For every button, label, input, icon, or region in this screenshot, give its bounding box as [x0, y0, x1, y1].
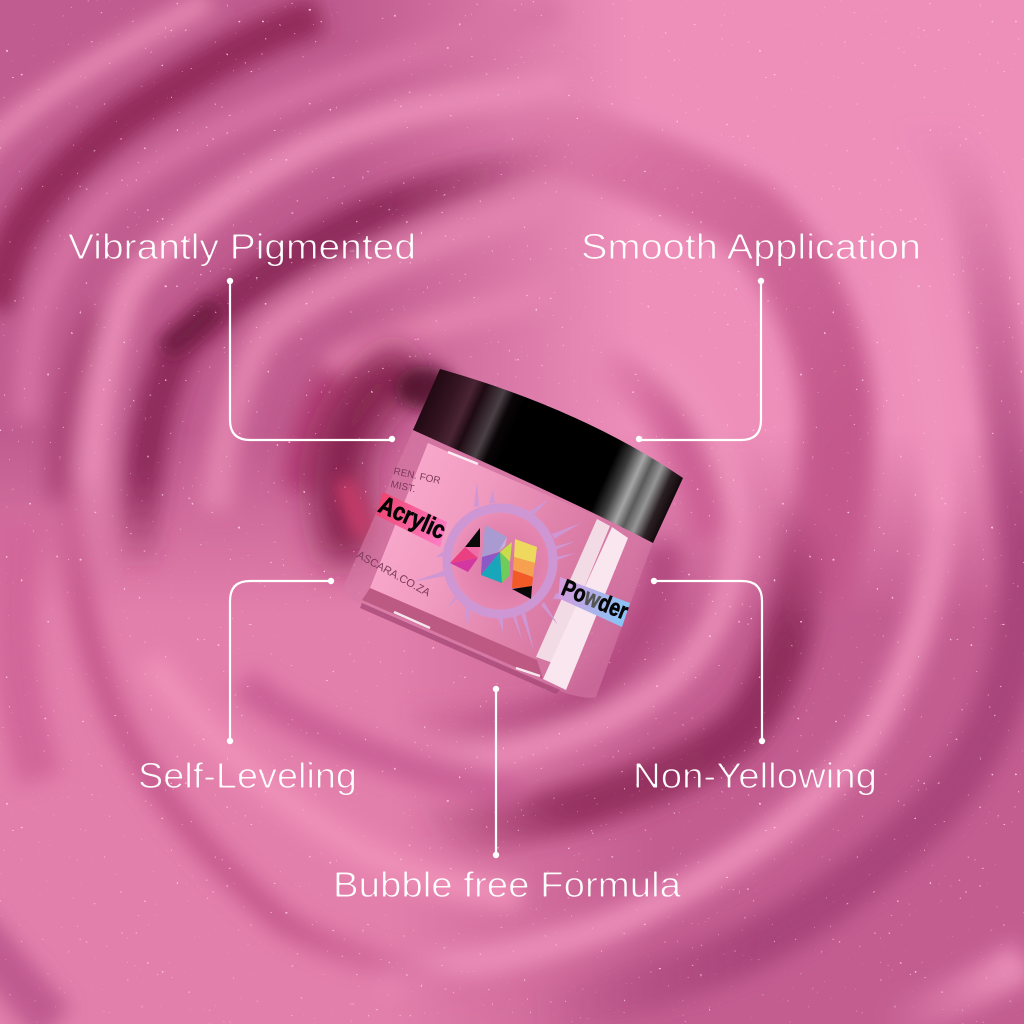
label: Powder: Powder — [558, 575, 632, 625]
heading: Vibrantly Pigmented: Vibrantly Pigmented — [68, 226, 416, 267]
connector: Vibrantly Pigmented — [227, 278, 395, 442]
bottom left folds — [73, 480, 120, 725]
bottom right folds — [420, 500, 803, 831]
product jar — [345, 366, 683, 698]
jar lid — [413, 369, 683, 543]
small print text: REN. FOR — [392, 466, 441, 487]
jar powder fill — [360, 443, 600, 694]
white stripe label — [536, 519, 628, 690]
jar glass body — [345, 430, 653, 698]
jar shadow — [395, 366, 455, 410]
connector: Non-Yellowing — [651, 578, 765, 744]
connector: Bubble free Formula — [493, 686, 499, 858]
small print text — [355, 466, 441, 600]
heading: Non-Yellowing: Non-Yellowing — [633, 755, 877, 796]
connector: Self-Leveling — [227, 578, 334, 744]
small print text: ASCARA.CO.ZA — [355, 549, 433, 600]
small print text: MIST. — [389, 479, 417, 495]
label: Acrylic: Acrylic — [375, 491, 450, 545]
heading: Bubble free Formula: Bubble free Formula — [333, 864, 682, 905]
logo mark — [450, 525, 537, 599]
heading: Smooth Application: Smooth Application — [581, 226, 921, 267]
top right folds — [520, 128, 838, 600]
logo splatter ring — [412, 482, 581, 651]
connector: Smooth Application — [636, 278, 764, 442]
top left folds — [0, 0, 210, 165]
heading: Self-Leveling: Self-Leveling — [138, 755, 357, 796]
